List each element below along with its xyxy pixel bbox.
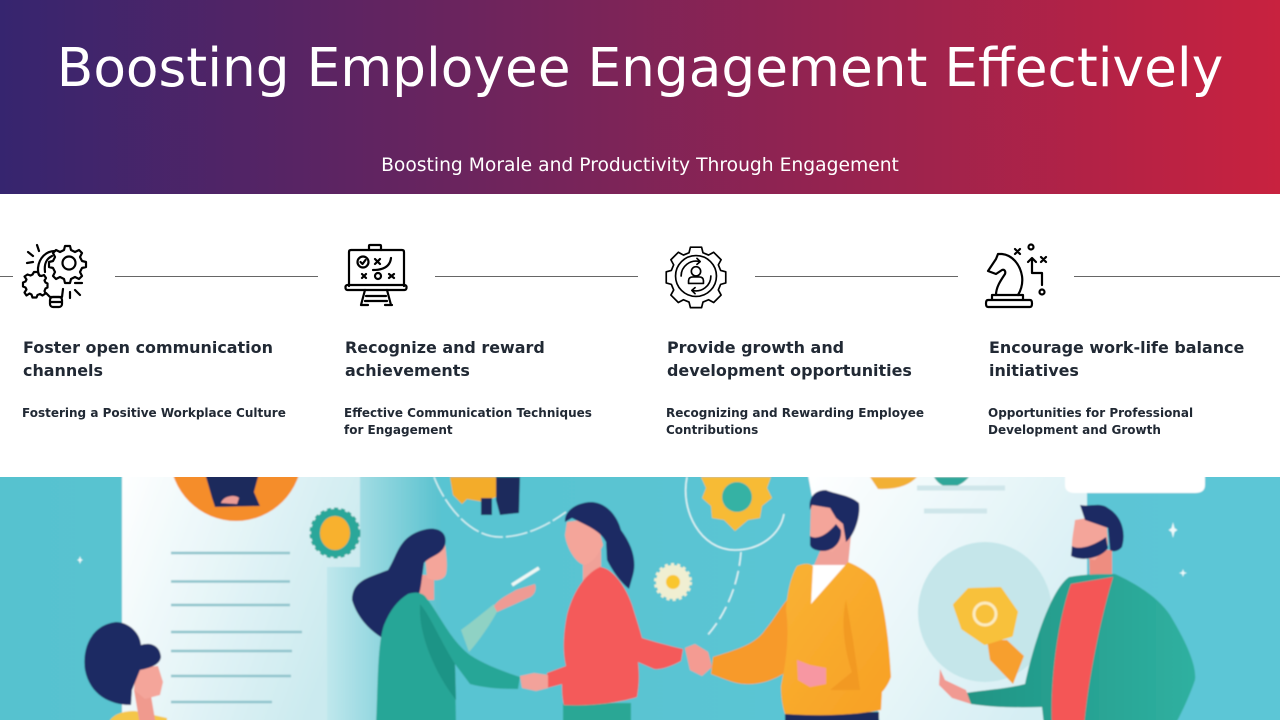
left document [122,470,360,720]
woman with red cardigan [520,502,683,720]
step 1 heading: Foster open communication channels [23,338,273,380]
header banner [0,0,1280,194]
glow behind woman [327,470,440,720]
top dashed arc and figure [434,477,566,537]
step 1 text: Fostering a Positive Workplace Culture [22,406,286,420]
green gear [311,509,359,557]
step 3 heading: Provide growth and development opportunities [667,338,912,380]
small pale gear [656,565,690,599]
sparkles [77,522,1187,577]
orange circle badge [170,389,302,521]
illustration: team collaboration [0,477,1280,720]
man in green jacket [939,505,1195,720]
background teal [0,470,1280,720]
icon: chess knight strategy [984,243,1048,308]
speech bubble and top items [870,470,1205,511]
step 4 text: Opportunities for Professional Development and Growth [988,406,1193,436]
woman with green sweater [352,529,539,720]
subtitle: Boosting Morale and Productivity Through Engagement [381,155,899,176]
right document [807,470,1087,720]
document lines [171,553,302,702]
icon: strategy board [344,244,408,306]
step 2 text: Effective Communication Techniques for Engagement [344,406,592,436]
icon: lightbulb with gears [22,244,88,308]
panel: steps [0,194,1280,477]
icon: gear with person [665,246,727,308]
man in yellow sweater [685,490,891,720]
yellow gear with ring [686,477,784,638]
girl bottom left [84,622,167,720]
step 4 heading: Encourage work-life balance initiatives [989,338,1244,380]
pale circle with hex badge [918,542,1052,684]
step 2 heading: Recognize and reward achievements [345,338,545,380]
title: Boosting Employee Engagement Effectively [57,37,1223,99]
step 3 text: Recognizing and Rewarding Employee Contributions [666,406,924,436]
